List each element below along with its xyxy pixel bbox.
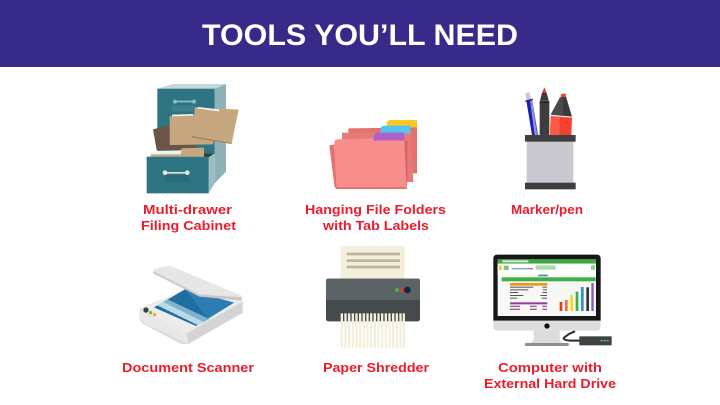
icon: marker and pen cup	[525, 87, 576, 189]
label: paper shredder: Paper Shredder	[323, 360, 429, 375]
label: marker/pen: Marker/pen	[511, 202, 583, 217]
label: filing cabinet: Multi-drawer	[143, 202, 232, 217]
header banner	[0, 0, 720, 67]
label: computer with external hard drive	[484, 360, 616, 391]
icon: filing cabinet	[147, 84, 239, 193]
icon: paper shredder	[326, 246, 420, 348]
label: document scanner: Document Scanner	[122, 360, 254, 375]
label: hanging file folders: Hanging File Folders	[305, 202, 446, 217]
label: hanging file folders	[305, 202, 446, 233]
label: hanging file folders: with Tab Labels	[322, 218, 429, 233]
label: filing cabinet	[141, 202, 237, 233]
icon: hanging file folders	[329, 120, 417, 189]
icon: document scanner	[139, 265, 243, 344]
icon: computer with external hard drive	[493, 255, 612, 346]
label: filing cabinet: Filing Cabinet	[141, 218, 237, 233]
label: computer with external hard drive: Computer with	[498, 360, 602, 375]
label: computer with external hard drive: External Hard Drive	[484, 376, 616, 391]
title: TOOLS YOU’LL NEED	[202, 19, 518, 52]
